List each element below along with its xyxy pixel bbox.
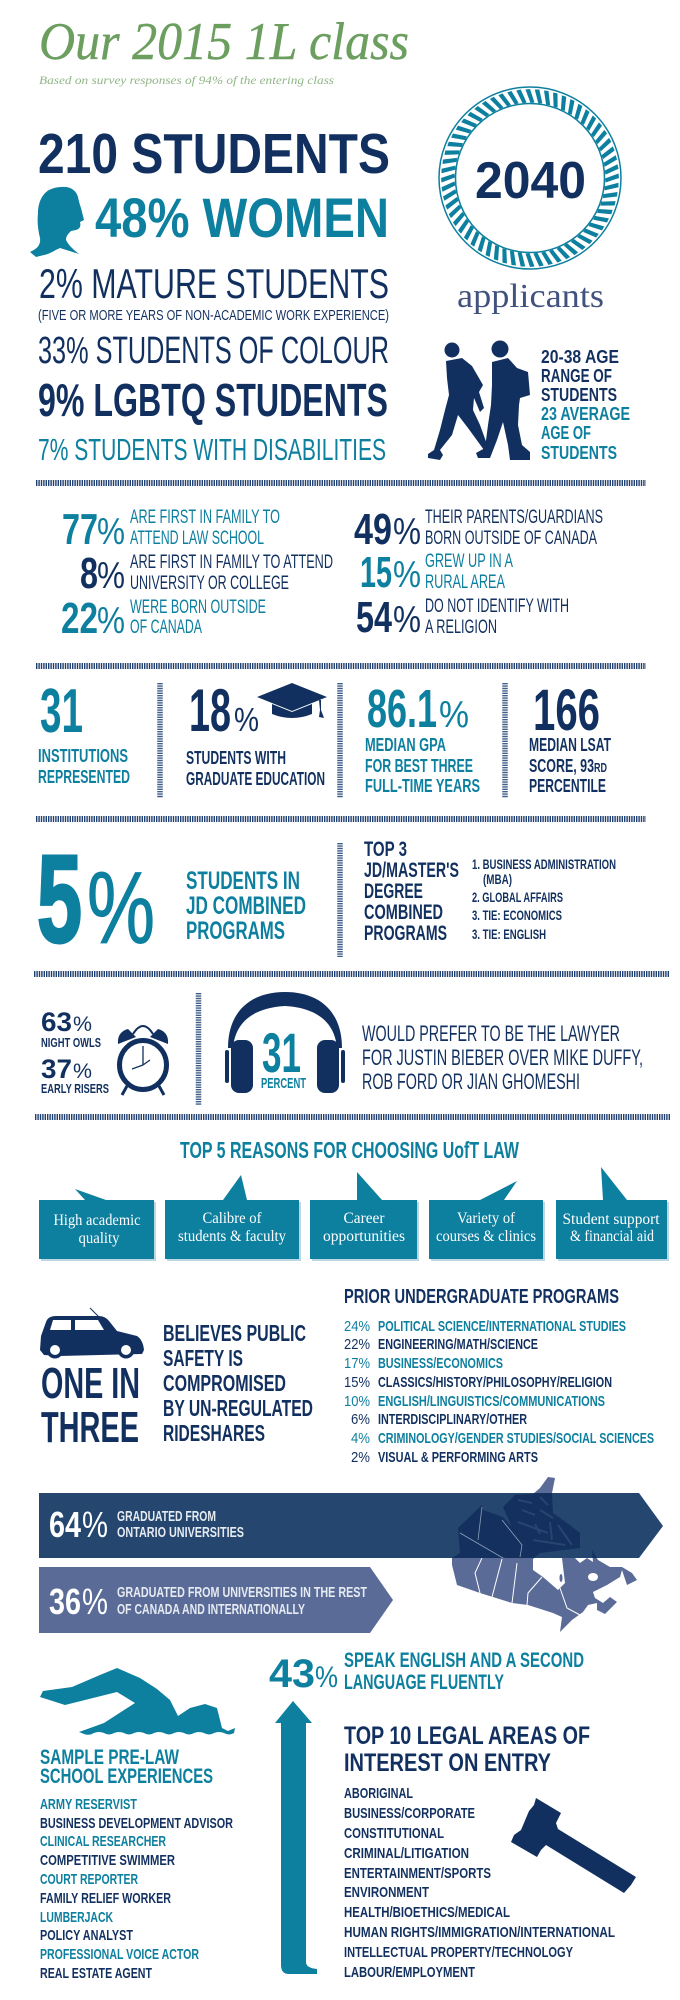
stat: 8% first in family to attend university: 8 — [80, 549, 98, 598]
list: top 3 programs: 3. TIE: ENGLISH — [472, 926, 546, 942]
panel: prior undergraduate programs — [344, 1286, 654, 1466]
text: age range — [541, 347, 630, 463]
text: believes public safety is compromised: COMPROMISED — [163, 1370, 286, 1396]
stat: 210 students: 210 STUDENTS — [38, 122, 390, 186]
bubble: student support and financial aid: & financial aid — [570, 1228, 654, 1245]
stat: 31 institutions: INSTITUTIONS — [38, 746, 128, 766]
list: experiences: CLINICAL RESEARCHER — [40, 1833, 166, 1850]
stat: 15% grew up in a rural area: % — [393, 554, 421, 595]
list: programs with percentages: 10% — [344, 1393, 370, 1410]
bubble: career opportunities: Career — [344, 1210, 385, 1227]
stat: 43% speak a second language: 43 — [269, 1652, 315, 1696]
stat: 54% do not identify with a religion: DO NOT IDENTIFY WITH — [425, 596, 569, 617]
bubble: student support and financial aid — [556, 1167, 669, 1261]
text: age range: 23 AVERAGE — [541, 404, 630, 424]
list: programs with percentages: 6% — [351, 1411, 370, 1428]
stat: 37% early risers: 37 — [41, 1054, 72, 1084]
stat: 49% parents born outside of Canada: 49 — [354, 505, 392, 554]
panel: family and background stats — [61, 505, 603, 643]
stat: 166 median LSAT: 166 — [533, 678, 600, 743]
icon: headphones with 31 percent — [225, 992, 345, 1093]
heading: top 3 combined programs — [364, 838, 459, 945]
stat: 166 median LSAT — [529, 678, 611, 796]
panel: headline stats — [30, 122, 390, 467]
stat: 8% first in family to attend university: ARE FIRST IN FAMILY TO ATTEND — [130, 552, 333, 573]
panel: JD combined programs — [37, 831, 616, 969]
heading: top 3 combined programs: PROGRAMS — [364, 922, 447, 945]
list: top 3 programs: 3. TIE: ECONOMICS — [472, 907, 562, 923]
bubble: high academic quality: quality — [78, 1230, 120, 1247]
stat: 54% do not identify with a religion — [356, 593, 569, 642]
stat: 7% students with disabilities: 7% STUDENTS WITH DISABILITIES — [38, 432, 386, 467]
badge: 2040 applicants — [409, 69, 641, 315]
stat: 54% do not identify with a religion: % — [393, 599, 421, 640]
list: programs with percentages: 4% — [351, 1430, 370, 1447]
list: legal areas: INTELLECTUAL PROPERTY/TECHNOLOGY — [344, 1944, 573, 1961]
stat: 18% graduate education: GRADUATE EDUCATION — [186, 769, 325, 789]
icon: headphones with 31 percent: PERCENT — [261, 1075, 306, 1092]
stat: 8% first in family to attend university: % — [97, 555, 125, 596]
panel: sample pre-law school experiences — [40, 1746, 233, 1982]
stat: 18% graduate education: 18 — [189, 677, 231, 744]
bubble: calibre of students and faculty: students & faculty — [178, 1228, 286, 1245]
text: one in three: THREE — [41, 1403, 139, 1452]
list: top 3 programs: (MBA) — [483, 871, 512, 887]
stat: 18% graduate education: % — [234, 701, 259, 738]
stat: 86.1% median GPA: MEDIAN GPA — [365, 735, 446, 755]
text: believes public safety is compromised: SAFETY IS — [163, 1345, 243, 1371]
arrow bar: 64% Ontario universities: GRADUATED FROM — [117, 1509, 216, 1525]
list: experiences: BUSINESS DEVELOPMENT ADVISOR — [40, 1815, 233, 1832]
list: top 3 programs: 1. BUSINESS ADMINISTRATION — [472, 856, 616, 872]
heading: top 5 reasons: TOP 5 REASONS FOR CHOOSING UofT LAW — [180, 1137, 519, 1163]
stat: 22% born outside of Canada — [61, 594, 266, 643]
icon: headphones with 31 percent: 31 — [262, 1021, 301, 1084]
list: experiences: POLICY ANALYST — [40, 1927, 133, 1944]
text: age range: STUDENTS — [541, 385, 617, 405]
bubble: high academic quality — [39, 1189, 156, 1261]
list: programs with percentages: BUSINESS/ECONOMICS — [378, 1355, 503, 1372]
stat: 43% speak a second language — [269, 1649, 584, 1696]
stat: 31 institutions — [38, 677, 130, 787]
stat: 15% grew up in a rural area: 15 — [360, 548, 392, 597]
stat: 86.1% median GPA: % — [439, 694, 469, 736]
icon: walking students — [428, 340, 530, 460]
stat: 5%: 5 — [37, 831, 82, 969]
list: programs with percentages: 15% — [344, 1374, 370, 1391]
list: experiences: COURT REPORTER — [40, 1871, 138, 1888]
stat: 77% first in family to attend law school: ATTEND LAW SCHOOL — [130, 528, 264, 549]
list: experiences: FAMILY RELIEF WORKER — [40, 1890, 171, 1907]
text: students in JD combined programs — [186, 867, 306, 945]
stat: 63% night owls: NIGHT OWLS — [41, 1035, 101, 1050]
stat: 63% night owls: % — [73, 1013, 92, 1036]
text: age range: RANGE OF — [541, 366, 612, 386]
text: one in three — [41, 1359, 140, 1452]
list: programs with percentages: INTERDISCIPLINARY/OTHER — [378, 1411, 527, 1428]
stat: 2% mature students: 2% MATURE STUDENTS — [39, 260, 389, 307]
stat: 49% parents born outside of Canada — [354, 505, 603, 554]
stat: 43% speak a second language: LANGUAGE FLUENTLY — [344, 1671, 504, 1694]
stat: 18% graduate education: STUDENTS WITH — [186, 748, 286, 768]
arrow bar: 64% Ontario universities — [39, 1493, 663, 1558]
text: one in three: ONE IN — [41, 1359, 140, 1408]
list: experiences: PROFESSIONAL VOICE ACTOR — [40, 1946, 199, 1963]
text: believes public safety is compromised: BELIEVES PUBLIC — [163, 1320, 306, 1346]
stat: 18% graduate education — [186, 677, 325, 789]
text: students in JD combined programs: PROGRAMS — [186, 917, 285, 945]
stat: 49% parents born outside of Canada: % — [393, 511, 421, 552]
badge: 2040 applicants: 2040 — [475, 152, 586, 210]
stat: 43% speak a second language: % — [315, 1661, 338, 1694]
stat: 48% women: 48% WOMEN — [95, 186, 389, 249]
stat: 49% parents born outside of Canada: BORN OUTSIDE OF CANADA — [425, 528, 597, 549]
stat: 63% night owls: 63 — [41, 1007, 72, 1037]
text: believes public safety is compromised: RIDESHARES — [163, 1420, 265, 1446]
list: legal areas: HEALTH/BIOETHICS/MEDICAL — [344, 1904, 510, 1921]
icon: alarm clock — [118, 1026, 168, 1095]
arrow bar: 64% Ontario universities: 64 — [49, 1504, 81, 1545]
stat: 15% grew up in a rural area: GREW UP IN A — [425, 551, 513, 572]
heading: sample experiences: SCHOOL EXPERIENCES — [40, 1765, 213, 1788]
heading: sample experiences: SAMPLE PRE-LAW — [40, 1746, 179, 1769]
heading: top 10 legal areas — [344, 1722, 590, 1777]
arrow bar: 64% Ontario universities: % — [82, 1504, 108, 1545]
list: programs with percentages: 22% — [344, 1336, 370, 1353]
badge: 2040 applicants: applicants — [457, 278, 604, 315]
stat: 37% early risers: EARLY RISERS — [41, 1081, 109, 1096]
list: legal areas — [344, 1785, 615, 1981]
list: experiences: COMPETITIVE SWIMMER — [40, 1852, 175, 1869]
stat: 54% do not identify with a religion: 54 — [356, 593, 392, 642]
list: programs with percentages: 17% — [344, 1355, 370, 1372]
icon: swimmer — [40, 1668, 235, 1735]
heading: sample experiences — [40, 1746, 213, 1788]
stat: 86.1% median GPA: 86.1 — [367, 679, 437, 739]
stat: 86.1% median GPA — [365, 679, 480, 796]
stat: 15% grew up in a rural area — [360, 548, 513, 597]
list: programs with percentages: VISUAL & PERFORMING ARTS — [378, 1449, 538, 1466]
stat: 54% do not identify with a religion: A RELIGION — [425, 617, 497, 638]
stat: 22% born outside of Canada: OF CANADA — [130, 617, 202, 638]
text: believes public safety is compromised: BY UN-REGULATED — [163, 1395, 313, 1421]
stat: 9% LGBTQ students: 9% LGBTQ STUDENTS — [38, 374, 388, 426]
stat: 166 median LSAT: PERCENTILE — [529, 776, 606, 796]
subtitle: Based on survey responses of 94% of the entering class — [39, 73, 334, 87]
list: programs with percentages — [344, 1318, 654, 1466]
stat: 8% first in family to attend university — [80, 549, 333, 598]
list: legal areas: ENTERTAINMENT/SPORTS — [344, 1865, 491, 1882]
arrow bar: 36% rest of Canada and internationally — [39, 1567, 393, 1633]
stat: 5%: % — [87, 851, 155, 965]
bubble: calibre of students and faculty — [165, 1175, 301, 1261]
stat: 8% first in family to attend university: UNIVERSITY OR COLLEGE — [130, 573, 289, 594]
bubble: student support and financial aid: Student support — [562, 1211, 660, 1228]
stat: 86.1% median GPA: FULL-TIME YEARS — [365, 776, 480, 796]
list: top 3 programs: 2. GLOBAL AFFAIRS — [472, 889, 563, 905]
map: Canada overlap on bar — [452, 1493, 596, 1558]
text: students in JD combined programs: STUDENTS IN — [186, 867, 300, 895]
list: legal areas: BUSINESS/CORPORATE — [344, 1805, 475, 1822]
icon: car — [40, 1308, 144, 1358]
arrow bar: 36% rest of Canada and internationally: 36 — [49, 1581, 81, 1622]
stat: 37% early risers: % — [73, 1060, 92, 1083]
bubble: variety of courses and clinics: courses & clinics — [436, 1228, 536, 1245]
text: students in JD combined programs: JD COMBINED — [186, 892, 306, 920]
list: legal areas: ABORIGINAL — [344, 1785, 413, 1802]
map: Canada behind bars, lower layer — [452, 1477, 637, 1632]
stat: 77% first in family to attend law school: 77 — [62, 505, 98, 554]
text: age range: 20-38 AGE — [541, 347, 619, 367]
stat: 166 median LSAT: MEDIAN LSAT — [529, 735, 611, 755]
arrow bar: 36% rest of Canada and internationally: % — [82, 1581, 108, 1622]
stat: 33% students of colour: 33% STUDENTS OF COLOUR — [38, 330, 389, 372]
arrow bar: 36% rest of Canada and internationally: GRADUATED FROM UNIVERSITIES IN THE REST — [117, 1585, 367, 1601]
stat: 77% first in family to attend law school — [62, 505, 280, 554]
stat: 22% born outside of Canada: % — [97, 600, 125, 641]
list: programs with percentages: 2% — [351, 1449, 370, 1466]
text: age range: AGE OF — [541, 423, 591, 443]
heading: top 3 combined programs: DEGREE — [364, 880, 423, 903]
stat: 22% born outside of Canada: WERE BORN OUTSIDE — [130, 597, 266, 618]
list: legal areas: ENVIRONMENT — [344, 1884, 429, 1901]
stat: 22% born outside of Canada: 22 — [61, 594, 98, 643]
list: top 3 programs — [472, 856, 616, 942]
stat: 43% speak a second language: SPEAK ENGLISH AND A SECOND — [344, 1649, 584, 1672]
arrow bar: 64% Ontario universities: ONTARIO UNIVERSITIES — [117, 1525, 244, 1541]
bubble: high academic quality: High academic — [54, 1212, 140, 1229]
stat: 77% first in family to attend law school: % — [97, 511, 125, 552]
stat: 31 institutions: REPRESENTED — [38, 767, 130, 787]
heading: top 10 legal areas: INTEREST ON ENTRY — [344, 1749, 551, 1777]
stat: 5% — [37, 831, 155, 969]
list: programs with percentages: ENGINEERING/MATH/SCIENCE — [378, 1336, 538, 1353]
stat: 37% early risers — [41, 1054, 109, 1096]
bubble: variety of courses and clinics — [429, 1181, 545, 1261]
stat: 31 institutions: 31 — [40, 677, 83, 746]
list: experiences: LUMBERJACK — [40, 1909, 113, 1926]
bubble: career opportunities: opportunities — [323, 1228, 405, 1245]
arrow bar: 36% rest of Canada and internationally: OF CANADA AND INTERNATIONALLY — [117, 1602, 305, 1618]
list: experiences — [40, 1796, 233, 1982]
bubble: variety of courses and clinics: Variety of — [457, 1210, 516, 1227]
list: legal areas: LABOUR/EMPLOYMENT — [344, 1964, 475, 1981]
icon: gavel — [511, 1798, 636, 1893]
list: programs with percentages: 24% — [344, 1318, 370, 1335]
list: programs with percentages: ENGLISH/LINGUISTICS/COMMUNICATIONS — [378, 1393, 605, 1410]
panel: top 10 legal areas of interest — [344, 1722, 636, 1981]
arrow: upward teal arrow — [275, 1701, 317, 1974]
list: legal areas: CRIMINAL/LITIGATION — [344, 1845, 469, 1862]
list: legal areas: CONSTITUTIONAL — [344, 1825, 444, 1842]
heading: top 3 combined programs: COMBINED — [364, 901, 443, 924]
panel: academic stats — [38, 677, 611, 798]
text: Justin Bieber lawyer — [362, 1021, 643, 1094]
list: experiences: REAL ESTATE AGENT — [40, 1965, 152, 1982]
stat: 166 median LSAT: SCORE, 93RD — [529, 756, 607, 776]
bubble: calibre of students and faculty: Calibre of — [202, 1210, 262, 1227]
heading: top 10 legal areas: TOP 10 LEGAL AREAS OF — [344, 1722, 590, 1750]
stat: 15% grew up in a rural area: RURAL AREA — [425, 572, 505, 593]
text: age range: STUDENTS — [541, 443, 617, 463]
text: believes public safety is compromised — [163, 1320, 313, 1446]
heading: top 3 combined programs: TOP 3 — [364, 838, 407, 861]
stat: 86.1% median GPA: FOR BEST THREE — [365, 756, 473, 776]
stat: 77% first in family to attend law school: ARE FIRST IN FAMILY TO — [130, 507, 280, 528]
icon: woman silhouette — [30, 187, 84, 257]
bubble: career opportunities — [310, 1172, 419, 1261]
panel: night owls and early risers — [41, 992, 643, 1105]
heading: top 3 combined programs: JD/MASTER'S — [364, 859, 459, 882]
title: Our 2015 1L class — [39, 13, 409, 71]
list: experiences: ARMY RESERVIST — [40, 1796, 137, 1813]
stat: 63% night owls — [41, 1007, 101, 1050]
panel: top 5 reasons speech bubbles — [39, 1167, 669, 1261]
note: mature students definition: (FIVE OR MORE YEARS OF NON-ACADEMIC WORK EXPERIENCE) — [38, 307, 389, 324]
icon: graduation cap — [257, 683, 327, 718]
